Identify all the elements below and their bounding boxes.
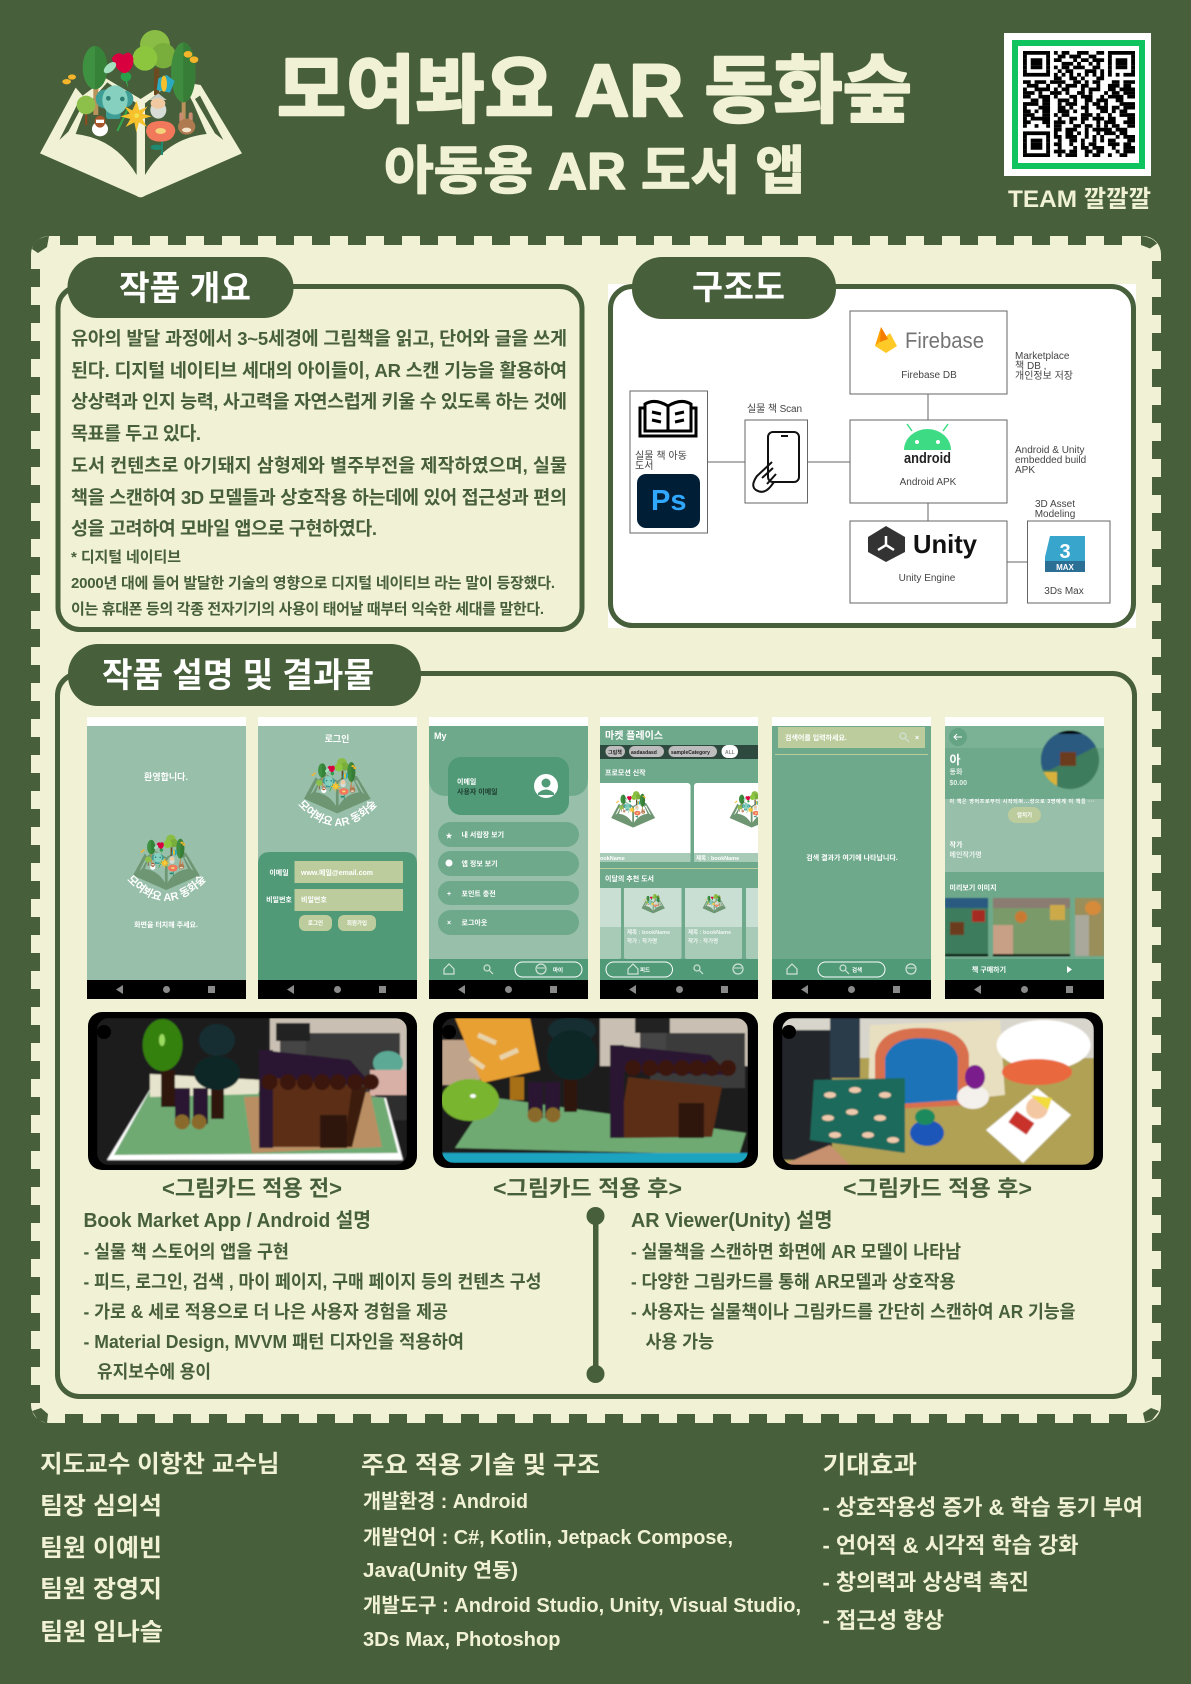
screenshot: book detail: 아 <box>950 753 961 767</box>
scan box <box>745 403 808 503</box>
text block: AR viewer: AR Viewer(Unity) 설명 <box>631 1209 832 1232</box>
screenshot: login: 로그인 <box>308 919 323 927</box>
screenshot: my page: 포인트 충전 <box>462 889 496 898</box>
screenshot: my page: 앱 정보 보기 <box>462 859 498 868</box>
screenshot: marketplace: 제목 : bookName <box>696 854 739 862</box>
screenshot: my page: × <box>447 920 451 927</box>
screenshot: marketplace: 제목 : bookName <box>688 928 731 936</box>
text block: book market app: - 실물 책 스토어의 앱을 구현 <box>84 1242 289 1262</box>
screenshot: book detail: 작가 <box>950 840 963 849</box>
footer: technology and structure: 개발환경 : Android <box>363 1490 528 1513</box>
screenshot: login: 회원가입 <box>347 919 367 927</box>
screenshot: marketplace: 작가 : 작가명 <box>688 937 718 945</box>
scan box: 실물 책 Scan <box>747 403 802 415</box>
screenshot: login: 이메일 <box>269 868 289 877</box>
screenshot: marketplace: 그림책 <box>608 749 622 756</box>
screenshot: book detail: $0.00 <box>950 780 967 787</box>
screenshot: login: 비밀번호 <box>266 895 292 904</box>
AR photo: before picture card <box>88 1012 417 1170</box>
footer: team members: 팀원 임나슬 <box>40 1619 163 1646</box>
firebase box: Firebase DB <box>901 370 957 381</box>
screenshot: my page: ★ <box>446 832 452 840</box>
team name: TEAM 깔깔깔 <box>1008 186 1151 213</box>
screenshot: login: 로그인 <box>325 734 349 744</box>
3ds max box: Modeling <box>1035 509 1075 520</box>
screenshot: book detail: 동화 <box>950 767 963 776</box>
footer: team members: 팀원 이예빈 <box>40 1535 162 1562</box>
firebase box <box>850 311 1007 394</box>
AR photo: after picture card, axe card <box>433 1012 758 1168</box>
android box <box>850 420 1007 503</box>
android note: Android & Unity <box>1015 445 1084 456</box>
text block: AR viewer: 사용 가능 <box>646 1332 714 1352</box>
footer: expected effects: - 언어적 & 시각적 학습 강화 <box>822 1533 1078 1558</box>
results heading pill: 작품 설명 및 결과물 <box>102 657 374 695</box>
3ds max box: MAX <box>1056 563 1075 572</box>
subtitle: 아동용 AR 도서 앱 <box>384 143 805 201</box>
screenshot: my page: 로그아웃 <box>462 918 488 927</box>
screenshot: search <box>772 717 931 999</box>
screenshot: my page <box>429 717 588 999</box>
screenshot: my page: 이메일 <box>457 777 476 786</box>
footer: technology and structure: 주요 적용 기술 및 구조 <box>361 1452 600 1479</box>
text block: AR viewer: - 다양한 그림카드를 통해 AR모델과 상호작용 <box>631 1272 956 1292</box>
screenshot: marketplace: 이달의 추천 도서 <box>605 874 654 883</box>
results heading pill <box>68 644 421 706</box>
caption: after card 1: <그림카드 적용 후> <box>493 1176 682 1201</box>
connector lines <box>707 394 1027 562</box>
footnote: digital native <box>71 549 555 618</box>
firebase box: Firebase <box>905 328 984 353</box>
overview heading pill: 작품 개요 <box>119 270 251 308</box>
footer: technology and structure <box>361 1452 801 1651</box>
left box: book and photoshop: 도서 <box>635 460 653 472</box>
text block: book market app: - 가로 & 세로 적용으로 더 나은 사용자 경험을 제공 <box>84 1302 448 1322</box>
vertical divider with dots <box>586 1207 604 1383</box>
AR photo: after picture card, teal card <box>773 1012 1103 1170</box>
android box: android <box>904 450 951 467</box>
firebase note: Marketplace <box>1015 351 1070 362</box>
3ds max box: 3Ds Max <box>1044 586 1084 597</box>
unity box <box>850 521 1007 603</box>
screenshot: welcome: 환영합니다. <box>144 771 188 782</box>
screenshot: marketplace: 작가 : 작가명 <box>627 937 657 945</box>
panel: description and results <box>55 644 1137 1399</box>
caption: after card 2: <그림카드 적용 후> <box>843 1176 1032 1201</box>
screenshot: my page: My <box>434 731 447 741</box>
android box: Android APK <box>900 477 957 488</box>
screenshot: marketplace: 프로모션 신작 <box>605 768 646 777</box>
screenshot: marketplace: 제목 : bookName <box>627 928 670 936</box>
text block: AR viewer <box>631 1209 1076 1352</box>
title: 모여봐요 AR 동화숲 <box>277 49 912 132</box>
unity box: Unity Engine <box>899 573 956 584</box>
screenshot: login: www.메일@email.com <box>300 868 373 877</box>
android note <box>1015 445 1086 476</box>
firebase note: 개인정보 저장 <box>1015 370 1073 382</box>
text block: AR viewer: - 사용자는 실물책이나 그림카드를 간단히 스캔하여 AR 기능을 <box>631 1302 1076 1322</box>
screenshot: marketplace: 피드 <box>640 966 650 974</box>
screenshot: book detail: 책 구매하기 <box>972 965 1006 974</box>
3ds max box <box>1028 499 1110 603</box>
text block: AR viewer: - 실물책을 스캔하면 화면에 AR 모델이 나타남 <box>631 1242 961 1262</box>
screenshot: marketplace: ALL <box>725 750 735 756</box>
screenshot: book detail: 미리보기 이미지 <box>950 883 997 892</box>
screenshot: my page: 사용자 이메일 <box>457 787 498 796</box>
overview heading pill <box>68 257 294 318</box>
footer: expected effects: - 상호작용성 증가 & 학습 동기 부여 <box>822 1495 1143 1520</box>
panel: architecture diagram <box>608 257 1136 628</box>
footer: technology and structure: 개발언어 : C#, Kotlin, Jetpack Compose, <box>363 1526 733 1549</box>
screenshot: login: 비밀번호 <box>301 895 327 904</box>
footer: team members: 팀장 심의석 <box>40 1493 162 1520</box>
footer: expected effects: - 접근성 향상 <box>822 1608 944 1633</box>
screenshot: login: 모여봐요 AR 동화숲 <box>298 800 377 826</box>
stamp-edged main panel <box>31 236 1161 1423</box>
footer: team members <box>40 1451 280 1646</box>
overview paragraph: 성을 고려하여 모바일 앱으로 구현하였다. <box>71 518 377 539</box>
overview paragraph: 도서 컨텐츠로 아기돼지 삼형제와 별주부전을 제작하였으며, 실물 <box>71 455 567 476</box>
android note: embedded build <box>1015 455 1086 466</box>
footer: technology and structure: 개발도구 : Android Studio, Unity, Visual Studio, <box>363 1594 801 1617</box>
text block: book market app: - Material Design, MVVM 패턴 디자인을 적용하여 <box>84 1332 464 1352</box>
android note: APK <box>1015 465 1035 476</box>
footer: expected effects <box>822 1452 1143 1633</box>
screenshot: my page: + <box>447 891 451 898</box>
footnote: digital native: * 디지털 네이티브 <box>71 549 181 566</box>
screenshot: book detail: 펼치기 <box>1017 811 1032 819</box>
left box: book and photoshop: 실물 책 아동 <box>635 450 687 462</box>
footnote: digital native: 2000년 대에 들어 발달한 기술의 영향으로 디지털 네이티브 라는 말이 등장했다. <box>71 574 555 592</box>
screenshot: book detail <box>945 717 1104 999</box>
screenshot: book detail: 메인작가명 <box>950 850 982 859</box>
screenshot: book detail: 이 책은 영어프로부터 시작되며...성으로 3명에게 이 책을 ··· <box>950 798 1095 805</box>
footer: team members: 지도교수 이항찬 교수님 <box>40 1451 280 1478</box>
screenshot: welcome <box>87 717 246 999</box>
screenshot: login <box>258 717 417 999</box>
footer: technology and structure: Java(Unity 연동) <box>363 1559 518 1582</box>
text block: book market app: 유지보수에 용이 <box>97 1362 211 1382</box>
unity box: Unity <box>913 529 978 559</box>
left box: book and photoshop: Ps <box>651 485 686 517</box>
overview paragraph: 책을 스캔하여 3D 모델들과 상호작용 하는데에 있어 접근성과 편의 <box>71 487 567 508</box>
footer: team members: 팀원 장영지 <box>40 1576 162 1603</box>
architecture heading pill: 구조도 <box>692 269 785 307</box>
3ds max box: 3D Asset <box>1035 499 1075 510</box>
QR code <box>1004 33 1151 176</box>
3ds max box: 3 <box>1059 541 1071 563</box>
caption: before card: <그림카드 적용 전> <box>162 1176 342 1201</box>
header logo: open book with forest animals <box>40 30 242 197</box>
screenshot: search: 검색 <box>852 966 862 974</box>
screenshot: my page: 내 서랍장 보기 <box>462 830 504 839</box>
screenshot: marketplace: asdasdasd <box>631 750 657 756</box>
architecture heading pill <box>632 257 836 319</box>
overview paragraph <box>71 328 567 539</box>
screenshot: welcome: 모여봐요 AR 동화숲 <box>127 874 206 902</box>
left box: book and photoshop <box>630 391 708 533</box>
screenshot: search: × <box>915 735 919 742</box>
screenshot: search: 검색어를 입력하세요. <box>785 733 847 742</box>
screenshot: marketplace: 마켓 플레이스 <box>605 729 663 742</box>
text block: book market app: - 피드, 로그인, 검색 , 마이 페이지, 구매 페이지 등의 컨텐츠 구성 <box>84 1272 542 1292</box>
footer: technology and structure: 3Ds Max, Photoshop <box>363 1629 560 1651</box>
firebase note: 책 DB , <box>1015 360 1046 372</box>
overview paragraph: 목표를 두고 있다. <box>71 423 201 444</box>
overview paragraph: 된다. 디지털 네이티브 세대의 아이들이, AR 스캔 기능을 활용하여 <box>71 360 567 381</box>
overview paragraph: 상상력과 인지 능력, 사고력을 자연스럽게 키울 수 있도록 하는 것에 <box>71 391 567 412</box>
panel: project overview <box>58 257 582 630</box>
screenshot: marketplace: sampleCategory <box>671 750 710 756</box>
footer: expected effects: 기대효과 <box>822 1452 917 1479</box>
screenshot: welcome: 화면을 터치해 주세요. <box>134 920 198 929</box>
screenshot: marketplace: ookName <box>600 856 625 862</box>
footer: expected effects: - 창의력과 상상력 촉진 <box>822 1570 1029 1595</box>
text block: book market app <box>84 1209 542 1382</box>
overview paragraph: 유아의 발달 과정에서 3~5세경에 그림책을 읽고, 단어와 글을 쓰게 <box>71 328 567 349</box>
firebase note <box>1015 351 1073 382</box>
text block: book market app: Book Market App / Android 설명 <box>84 1209 371 1232</box>
screenshot: marketplace <box>600 717 758 999</box>
screenshot: my page: 마이 <box>553 966 563 974</box>
footnote: digital native: 이는 휴대폰 등의 각종 전자기기의 사용이 태어날 때부터 익숙한 세대를 말한다. <box>71 600 544 618</box>
screenshot: search: 검색 결과가 여기에 나타납니다. <box>806 853 898 862</box>
